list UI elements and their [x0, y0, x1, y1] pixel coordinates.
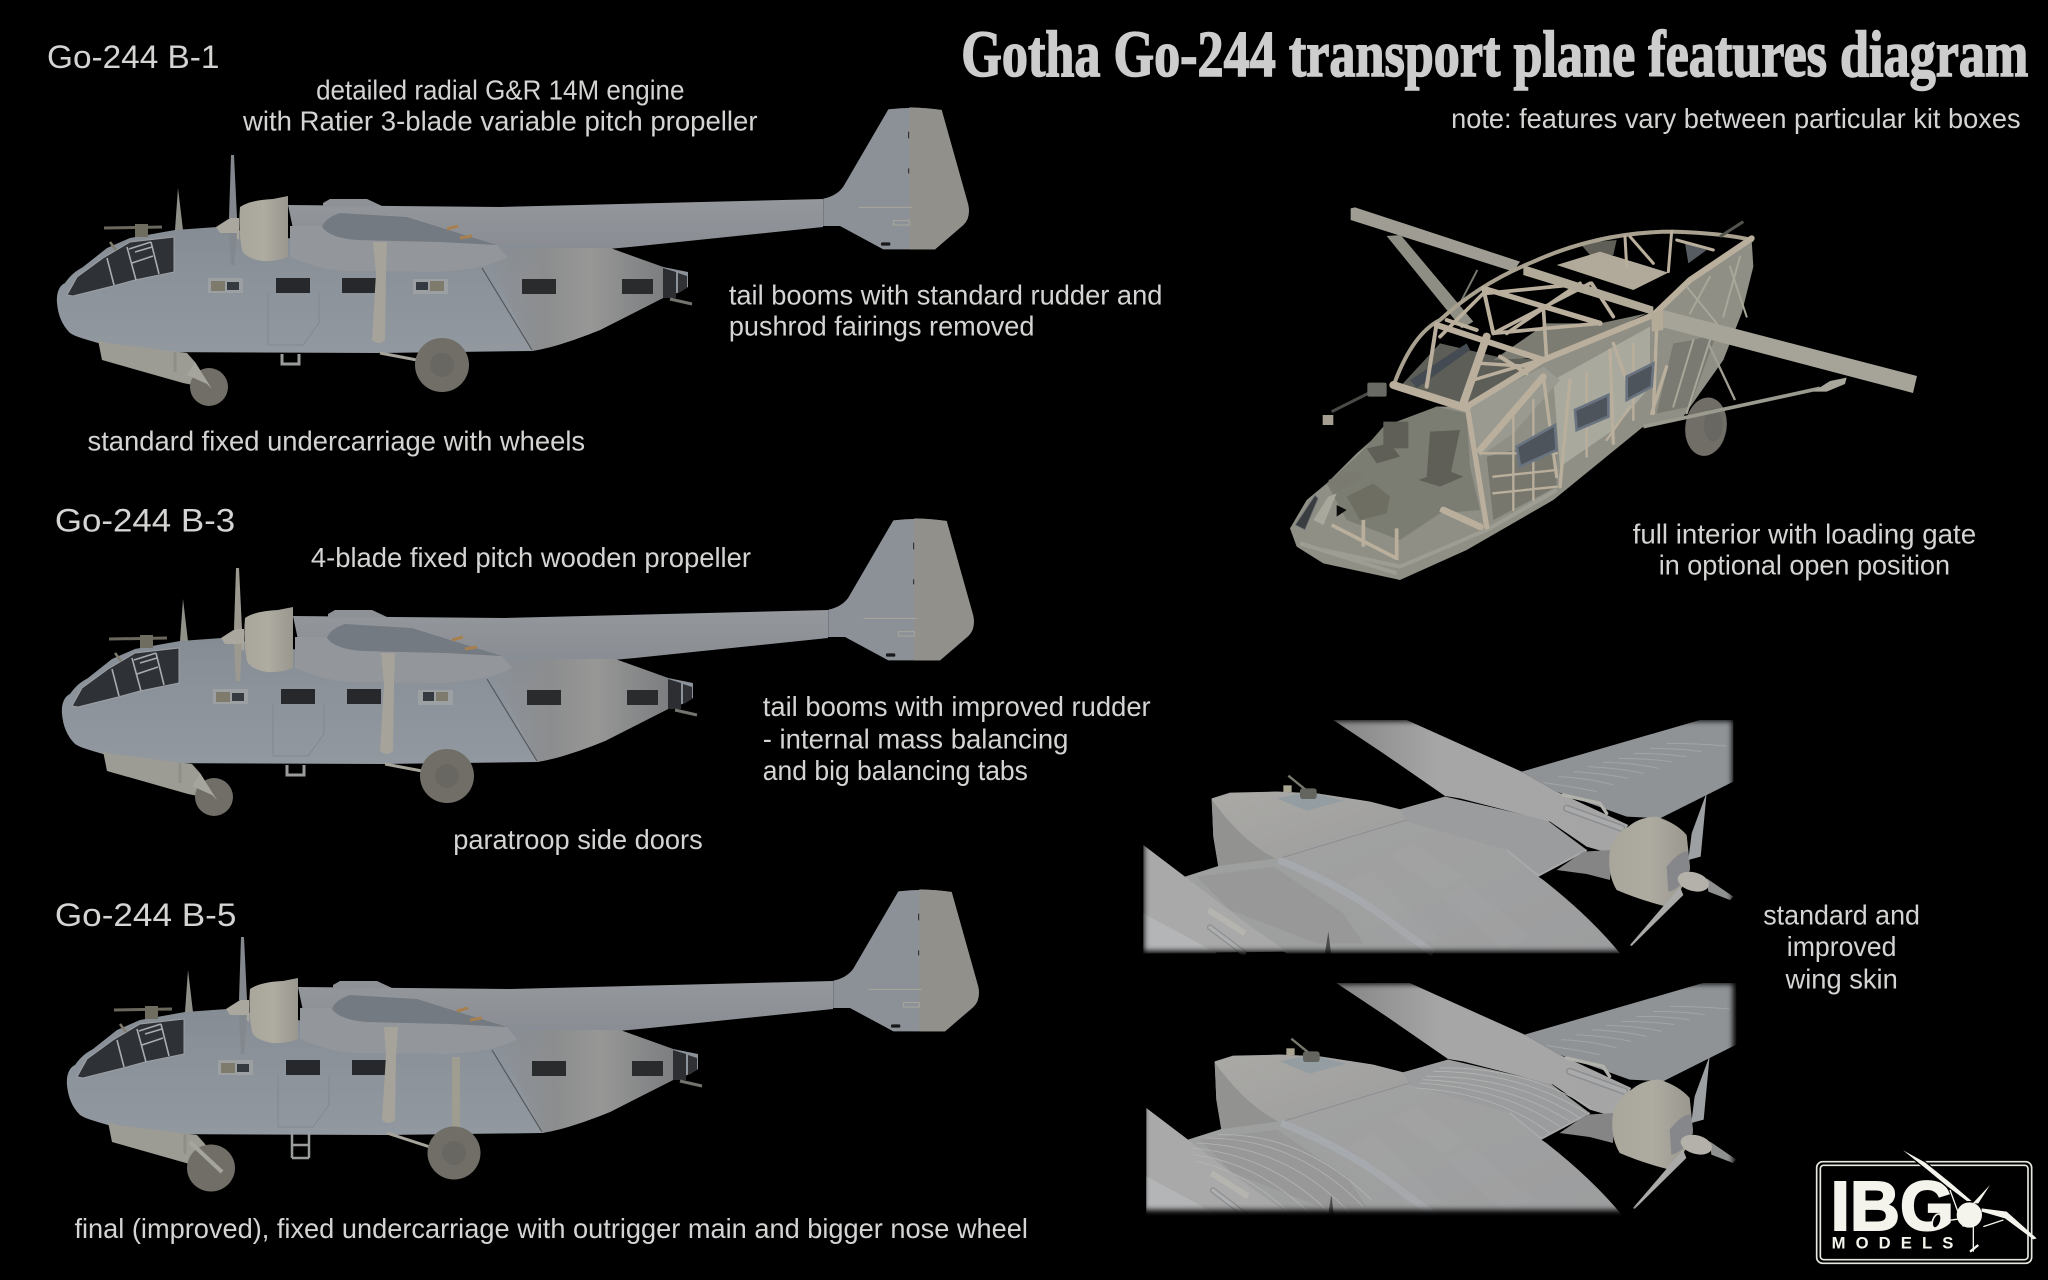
nose frame — [1332, 510, 1483, 560]
callout: tail booms standard: pushrod fairings removed — [729, 311, 1034, 342]
logo: IBG Models: MODELS — [1832, 1233, 1953, 1252]
logo: IBG Models: IBG — [1831, 1167, 1954, 1245]
callout: full interior: in optional open position — [1659, 550, 1950, 581]
aeroplane: Go-244 B-5 side view — [67, 889, 979, 1192]
callout: full interior — [1633, 518, 1976, 581]
render: standard wing skin — [1143, 720, 1733, 953]
callout: wing skin: improved — [1787, 931, 1896, 962]
callout: radial engine: detailed radial G&R 14M engine — [316, 74, 684, 105]
left wing strut — [1387, 235, 1473, 328]
cabin windows — [1517, 363, 1653, 467]
aeroplane: Go-244 B-1 side view — [57, 107, 969, 406]
callout: wing skin: wing skin — [1784, 964, 1898, 995]
callout: improved rudder: - internal mass balancing — [763, 723, 1068, 754]
hull base — [1290, 240, 1753, 580]
cockpit seats — [1367, 422, 1463, 487]
kit note: note: features vary between particular kit boxes — [1451, 103, 2021, 134]
callout: improved rudder — [763, 691, 1151, 786]
callout: radial engine — [242, 74, 758, 137]
aeroplane: Go-244 B-3 side view — [62, 518, 974, 816]
callout: wooden propeller: 4-blade fixed pitch wooden propeller — [311, 542, 751, 573]
top platform — [1557, 252, 1668, 290]
callout: full interior: full interior with loading gate — [1633, 518, 1976, 549]
cockpit floor — [1327, 407, 1480, 540]
floor bands — [1300, 490, 1557, 573]
callout: radial engine: with Ratier 3-blade variable pitch propeller — [242, 106, 758, 137]
callout: improved rudder: tail booms with improved rudder — [763, 691, 1151, 722]
logo: IBG Models — [1817, 1146, 2037, 1263]
heading: Go-244 B-1: Go-244 B-1 — [47, 38, 219, 75]
callout: tail booms standard: tail booms with standard rudder and — [729, 279, 1162, 310]
wing spar and starboard wing — [1523, 265, 1653, 315]
callout: standard undercarriage: standard fixed undercarriage with wheels — [88, 426, 585, 457]
wheel and outrigger — [1681, 395, 1731, 459]
heading: Go-244 B-3: Go-244 B-3 — [55, 502, 235, 539]
left wing — [1351, 207, 1520, 272]
machine guns — [1332, 390, 1375, 412]
interior cutaway model — [1290, 207, 1917, 580]
callout: final undercarriage: final (improved), fixed undercarriage with outrigger main and bigger nose wheel — [74, 1213, 1028, 1244]
callout: tail booms standard — [729, 279, 1162, 342]
callout: wing skin — [1763, 900, 1920, 995]
airframe ribs — [1393, 232, 1752, 527]
heading: Go-244 B-5: Go-244 B-5 — [55, 896, 236, 933]
callout: paratroop doors: paratroop side doors — [453, 824, 703, 855]
starboard wall seats — [1553, 327, 1650, 467]
callout: improved rudder: and big balancing tabs — [763, 755, 1028, 786]
callout: wing skin: standard and — [1763, 900, 1920, 931]
dim interior behind the lattice — [1400, 343, 1543, 407]
render: improved wing skin — [1146, 983, 1736, 1216]
